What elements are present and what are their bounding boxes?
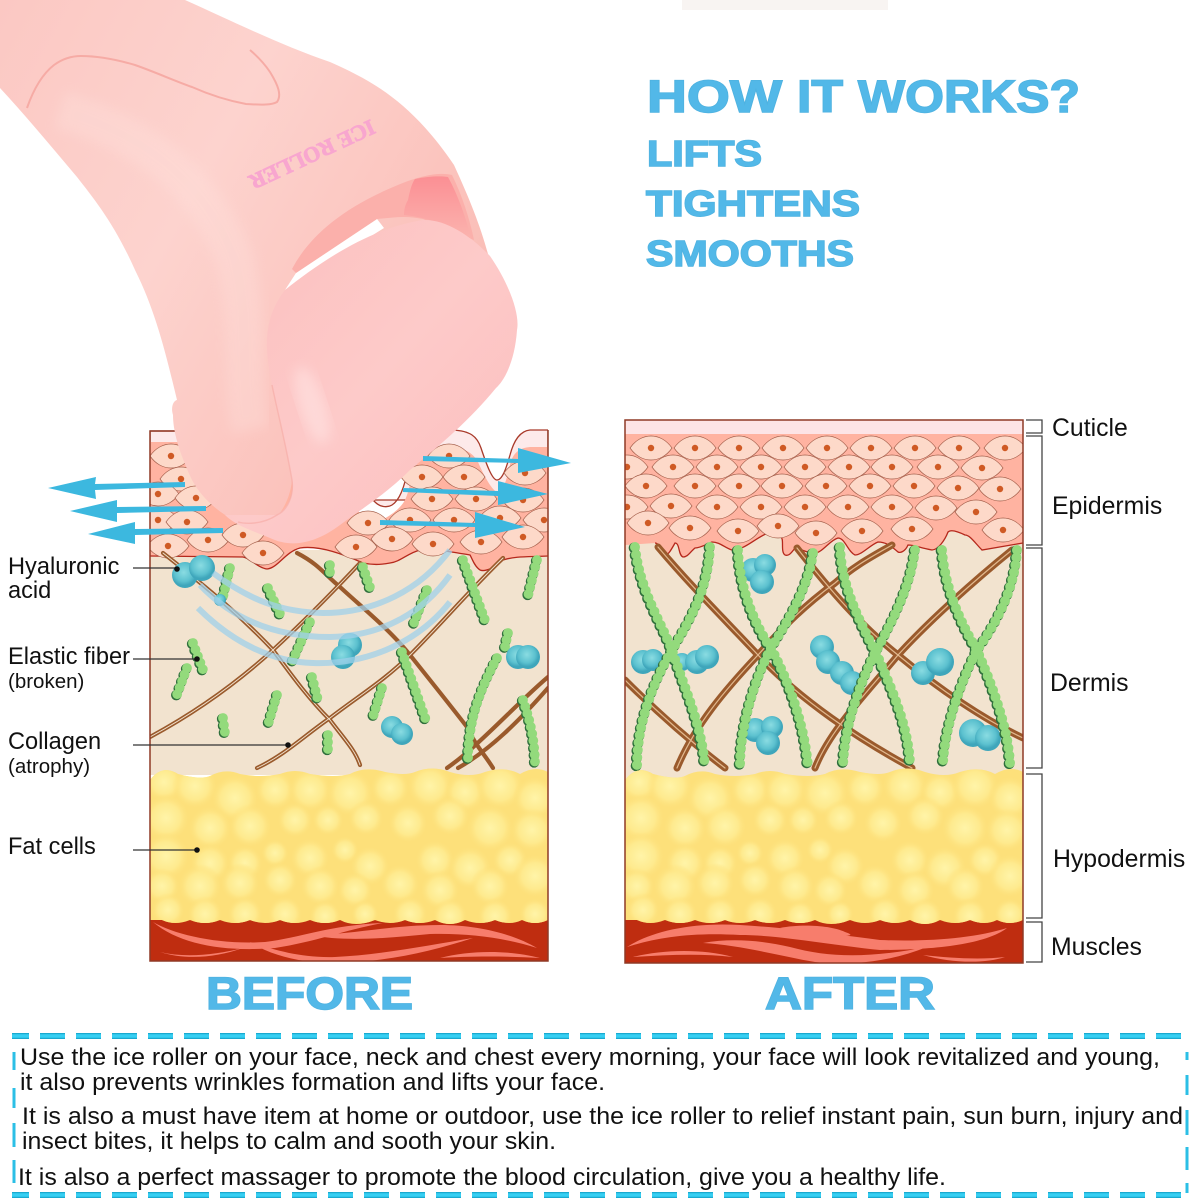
label: hyaluronic acid xyxy=(8,554,180,604)
waves before xyxy=(198,550,450,663)
heading: how it works: IT xyxy=(797,71,843,122)
label: dermis xyxy=(1026,548,1129,768)
epidermis before xyxy=(150,442,548,571)
cuticle after xyxy=(625,420,1023,434)
body text: insect bites, it helps to calm and sooth your skin. xyxy=(22,1128,556,1155)
roller brand text: ICE ROLLER xyxy=(244,115,379,195)
label: hyaluronic acid: acid xyxy=(8,578,51,604)
label: hypodermis: Hypodermis xyxy=(1053,846,1185,873)
arrows right xyxy=(380,448,571,538)
heading: before: BEFORE xyxy=(206,968,413,1019)
label: elastic fiber: Elastic fiber xyxy=(8,644,130,670)
elastic fibers after xyxy=(634,547,1017,768)
panel: after skin diagram xyxy=(606,420,1032,963)
label: collagen: (atrophy) xyxy=(8,755,90,778)
heading: how it works: SMOOTHS xyxy=(646,233,854,274)
collagen fibers before xyxy=(150,553,548,768)
label: hypodermis xyxy=(1026,774,1185,918)
body text xyxy=(18,1044,1183,1191)
label: muscles xyxy=(1026,922,1142,962)
label: hyaluronic acid: Hyaluronic xyxy=(8,554,120,580)
epidermis after xyxy=(625,434,1023,557)
dashed text box xyxy=(12,1036,1187,1195)
label: fat cells: Fat cells xyxy=(8,834,96,860)
panel border after xyxy=(625,420,1023,963)
label: epidermis: Epidermis xyxy=(1052,493,1162,520)
heading: how it works: HOW xyxy=(647,71,783,122)
top faint strip xyxy=(682,0,888,10)
epidermis lower edge after xyxy=(655,531,1023,557)
hyaluronic acid after xyxy=(631,554,1001,755)
label: elastic fiber: (broken) xyxy=(8,670,84,693)
elastic fibers before xyxy=(174,560,537,766)
heading: how it works: TIGHTENS xyxy=(646,183,860,224)
label: fat cells xyxy=(8,834,200,860)
handle seam xyxy=(27,50,279,108)
head highlight xyxy=(287,363,337,447)
heading: after: AFTER xyxy=(765,968,935,1019)
label: dermis: Dermis xyxy=(1050,670,1129,697)
muscle layer before xyxy=(150,920,548,960)
fat layer before xyxy=(150,768,548,924)
roller body xyxy=(0,0,488,530)
panel: before skin diagram xyxy=(137,428,565,963)
body highlight xyxy=(60,110,250,430)
fat layer after xyxy=(626,768,1022,924)
label: elastic fiber xyxy=(8,644,200,693)
heading: how it works xyxy=(646,71,1080,274)
roller head xyxy=(225,220,518,543)
dermis layer before xyxy=(150,550,548,775)
heading: how it works: WORKS? xyxy=(858,71,1080,122)
arrows left xyxy=(48,477,223,544)
opening interior xyxy=(404,176,471,238)
label: muscles: Muscles xyxy=(1051,934,1142,961)
label: collagen xyxy=(8,729,291,778)
label: epidermis xyxy=(1026,436,1162,545)
opening xyxy=(292,174,474,273)
cuticle before xyxy=(150,430,548,507)
body text: It is also a perfect massager to promote the blood circulation, give you a healthy life. xyxy=(18,1164,946,1191)
epidermis lower edge before xyxy=(150,547,548,571)
hyaluronic acid before xyxy=(172,555,540,745)
label: collagen: Collagen xyxy=(8,729,101,755)
collagen fibers after xyxy=(625,545,1023,768)
epidermis cells after xyxy=(606,436,1026,545)
ice roller xyxy=(0,0,518,543)
body text: It is also a must have item at home or outdoor, use the ice roller to relief instant pain, sun burn, injury and xyxy=(22,1103,1183,1130)
arm edge xyxy=(238,385,292,523)
body text: Use the ice roller on your face, neck and chest every morning, your face will look revitalized and young, xyxy=(20,1044,1160,1071)
label: cuticle: Cuticle xyxy=(1052,415,1128,442)
heading: how it works: LIFTS xyxy=(647,133,762,174)
epidermis cells before xyxy=(137,444,565,565)
white slit xyxy=(285,219,384,290)
muscle layer after xyxy=(626,920,1022,962)
panel border before xyxy=(150,430,548,961)
body text: it also prevents wrinkles formation and lifts your face. xyxy=(20,1069,605,1096)
